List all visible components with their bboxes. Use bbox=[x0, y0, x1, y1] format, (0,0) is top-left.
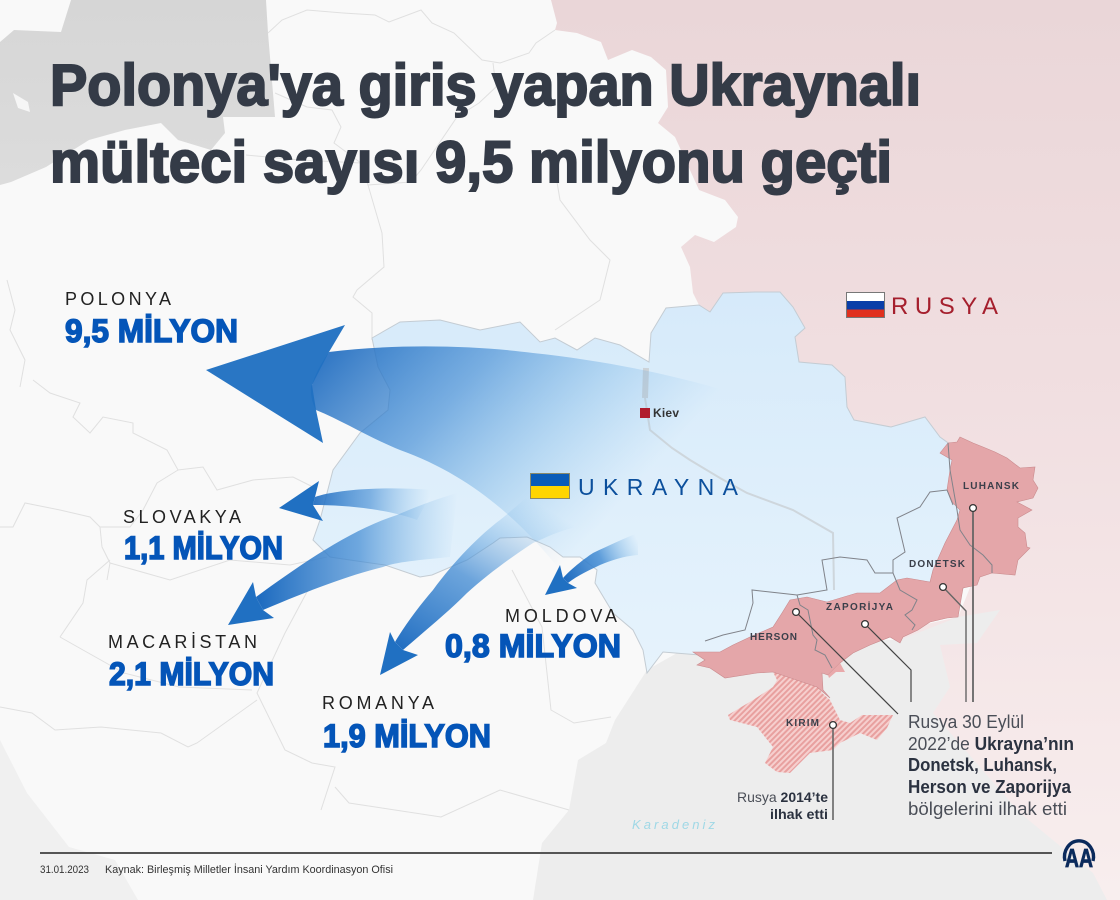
region labels: HERSON bbox=[750, 632, 797, 643]
arrow: Moldova bbox=[545, 533, 638, 595]
sea: Adriatic bbox=[0, 740, 138, 900]
label: Romania: ROMANYA bbox=[322, 693, 434, 713]
label: Black Sea: Karadeniz bbox=[632, 817, 716, 832]
country borders bbox=[0, 10, 611, 817]
region labels: ZAPORİJYA bbox=[826, 600, 893, 613]
callout: 2022 annexation: Donetsk, Luhansk, bbox=[908, 755, 1057, 775]
label: Moldova: 0,8 MİLYON bbox=[445, 628, 621, 664]
callout: 2014 annexation: Rusya 2014’te bbox=[737, 789, 828, 805]
callout lines bbox=[796, 508, 973, 820]
river reservoir bbox=[645, 368, 646, 398]
callout: 2022 annexation: 2022’de Ukrayna’nın bbox=[908, 734, 1074, 754]
icon: AA logo: AA bbox=[1065, 843, 1093, 873]
label: Hungary: 2,1 MİLYON bbox=[109, 656, 274, 692]
island in Baltic bbox=[13, 93, 30, 112]
region labels: DONETSK bbox=[909, 559, 966, 570]
arrow: Slovakia bbox=[279, 481, 433, 521]
title bbox=[50, 53, 921, 195]
annexed regions bbox=[693, 437, 1038, 773]
label: Poland: 9,5 MİLYON bbox=[65, 313, 238, 349]
Arabat sliver bbox=[828, 663, 845, 678]
label: Romania bbox=[322, 693, 491, 754]
label: Romania: 1,9 MİLYON bbox=[323, 718, 491, 754]
callout: 2022 annexation: bölgelerini ilhak etti bbox=[908, 799, 1067, 819]
arrow head bbox=[206, 325, 345, 443]
label: Moldova bbox=[445, 606, 621, 664]
label: Poland bbox=[65, 289, 238, 349]
sea: Black Sea and Azov bbox=[533, 610, 1107, 900]
arrow: Poland bbox=[206, 325, 723, 570]
arrow: Romania bbox=[380, 497, 577, 675]
icon: Russia flag bbox=[846, 292, 885, 318]
label: Moldova: MOLDOVA bbox=[505, 606, 617, 626]
label: Ukraine: UKRAYNA bbox=[578, 474, 739, 500]
callout: 2022 annexation bbox=[908, 712, 1074, 819]
region: occupied territories bbox=[693, 437, 1038, 698]
region: Crimea bbox=[728, 672, 893, 773]
label: Slovakia bbox=[123, 507, 283, 566]
footer: 31.01.2023 bbox=[40, 864, 89, 876]
icon: Ukraine flag bbox=[530, 473, 570, 499]
Dnieper river bbox=[645, 398, 834, 590]
label: Slovakia: SLOVAKYA bbox=[123, 507, 241, 527]
region: Russia bbox=[551, 0, 1120, 900]
region labels: LUHANSK bbox=[963, 481, 1020, 492]
label: Kyiv: Kiev bbox=[653, 406, 679, 420]
label: Poland: POLONYA bbox=[65, 289, 171, 309]
label: Russia: RUSYA bbox=[891, 293, 998, 320]
footer: Kaynak: Birleşmiş Milletler İnsani Yardım Koordinasyon Ofisi bbox=[105, 863, 393, 876]
region labels bbox=[750, 481, 1020, 729]
region: Ukraine bbox=[313, 292, 975, 673]
callout: 2014 annexation: ilhak etti bbox=[770, 806, 828, 822]
arrow: Hungary bbox=[228, 493, 457, 625]
title: Polonya'ya giriş yapan Ukraynalı bbox=[50, 53, 921, 118]
label: Hungary bbox=[108, 632, 274, 692]
callout: 2014 annexation bbox=[737, 789, 828, 822]
label: Hungary: MACARİSTAN bbox=[108, 632, 257, 652]
title: mülteci sayısı 9,5 milyonu geçti bbox=[50, 130, 892, 195]
callout: 2022 annexation: Rusya 30 Eylül bbox=[908, 712, 1024, 732]
callout: 2022 annexation: Herson ve Zaporijya bbox=[908, 777, 1072, 797]
sea: Baltic bbox=[0, 0, 275, 185]
region labels: KIRIM bbox=[786, 718, 819, 729]
arrow tail bbox=[311, 346, 723, 570]
label: Slovakia: 1,1 MİLYON bbox=[124, 530, 283, 566]
oblast boundaries bbox=[705, 443, 992, 668]
region markers bbox=[793, 505, 976, 728]
label: Russia bbox=[846, 292, 998, 320]
footer bbox=[40, 852, 1052, 876]
label: Kyiv bbox=[640, 406, 679, 420]
